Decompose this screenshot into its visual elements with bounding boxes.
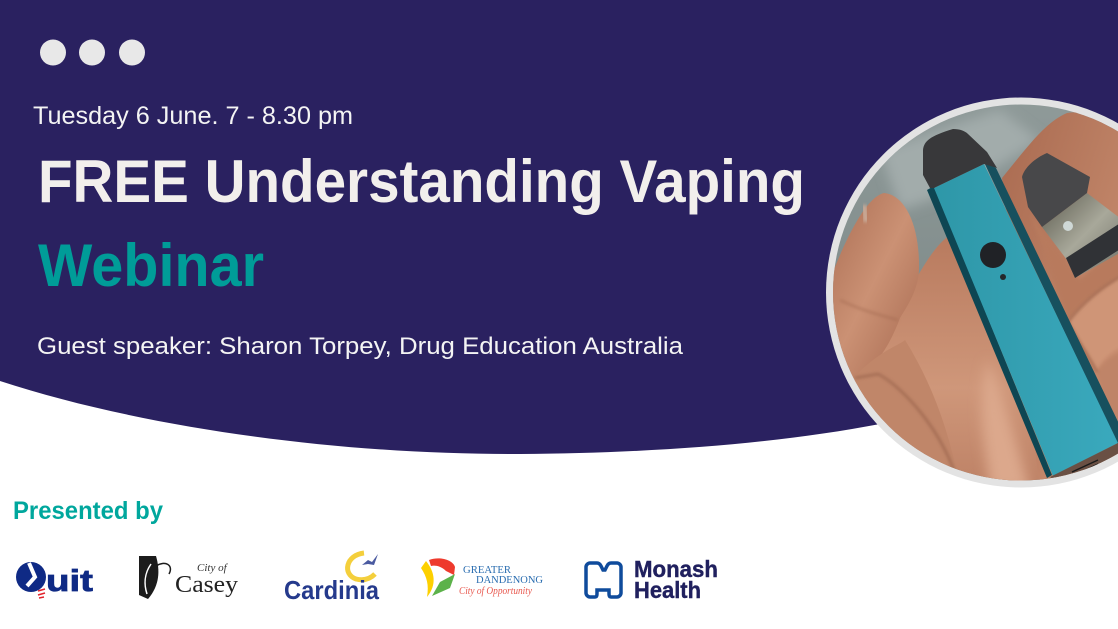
subtitle: Webinar: Webinar bbox=[38, 232, 264, 299]
vape pod bbox=[1022, 153, 1118, 278]
palm bbox=[851, 238, 1058, 480]
logo: City of Casey: City of bbox=[197, 562, 229, 574]
palm creases and lower fingers bbox=[854, 341, 956, 469]
logo: Monash Health: Health bbox=[634, 577, 701, 603]
logo: Monash Health: Monash bbox=[634, 556, 718, 582]
logo: Quit: uit bbox=[46, 563, 93, 598]
photo: hand holding vape in circle bbox=[826, 98, 1118, 490]
logo: Quit bbox=[16, 562, 93, 598]
three dots bbox=[40, 40, 145, 66]
logo: Greater Dandenong: GREATER bbox=[463, 565, 511, 576]
logo: Cardinia bbox=[284, 553, 379, 605]
logo: Greater Dandenong: City of Opportunity bbox=[459, 586, 533, 597]
title: FREE Understanding Vaping bbox=[38, 148, 805, 215]
logo: Monash Health bbox=[586, 556, 718, 603]
vape device bbox=[923, 129, 1118, 490]
logo: Cardinia: Cardinia bbox=[284, 575, 379, 605]
logo: Greater Dandenong: DANDENONG bbox=[476, 575, 543, 586]
heading: presented by: Presented by bbox=[13, 497, 163, 525]
logo: City of Casey: Casey bbox=[175, 572, 238, 598]
date and time: Tuesday 6 June. 7 - 8.30 pm bbox=[33, 102, 353, 130]
logo: Greater Dandenong bbox=[421, 558, 543, 597]
fingers behind vape bbox=[1002, 112, 1118, 490]
thumb bbox=[826, 193, 919, 378]
guest speaker: Guest speaker: Sharon Torpey, Drug Education Australia bbox=[37, 333, 683, 360]
navy header background bbox=[0, 0, 1118, 454]
logo: City of Casey bbox=[139, 556, 238, 599]
